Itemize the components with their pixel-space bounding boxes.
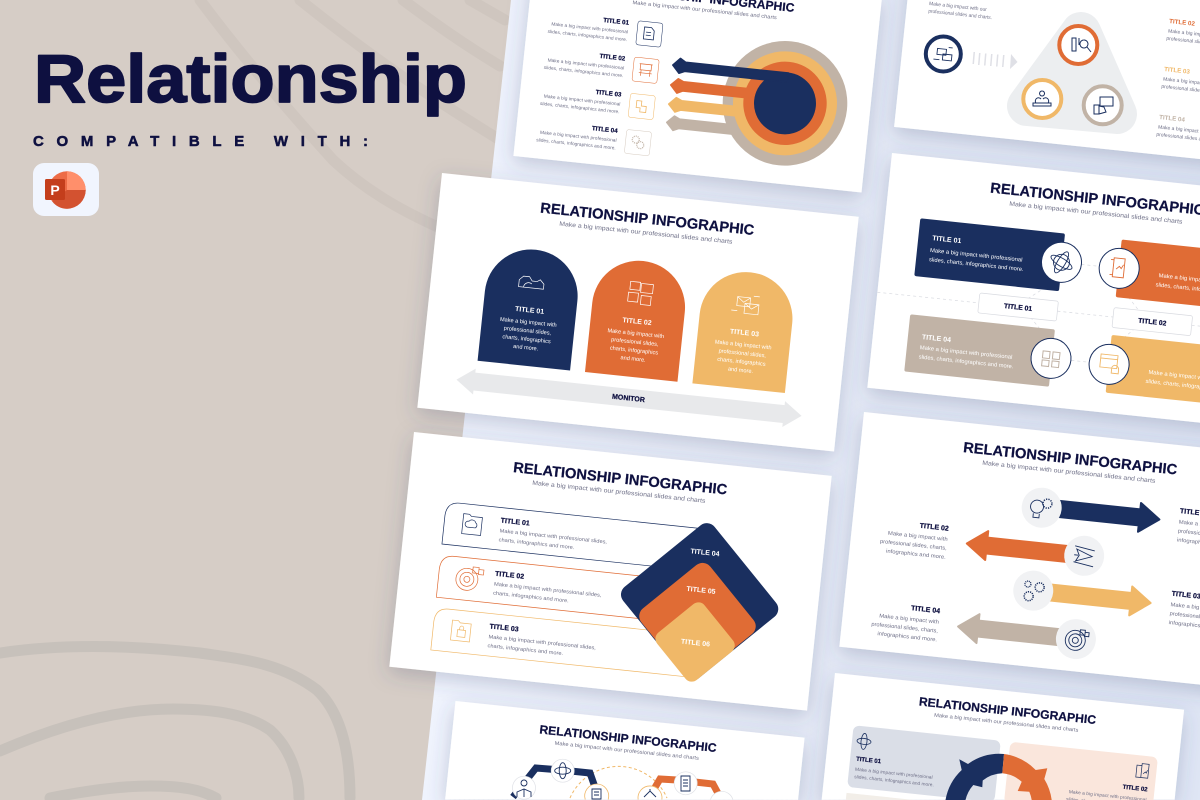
arch: title 02: professional slides,	[611, 337, 659, 348]
row 2	[543, 47, 659, 84]
triangle labels	[1156, 18, 1200, 145]
text: title 04: Make a big impact with	[879, 613, 939, 626]
text: title 02	[879, 519, 950, 561]
stacked diamonds: TITLE 05	[686, 586, 716, 596]
slide heading: Make a big impact with our professional slides and charts	[982, 460, 1156, 485]
arch: title 03: charts, infographics	[717, 357, 766, 368]
triangle labels: TITLE 02	[1169, 18, 1196, 28]
text: title 04: professional slides, charts,	[871, 622, 939, 635]
row 1: slides, charts, infographics and more.	[547, 29, 627, 42]
row: title 03: Make a big impact with professional slides,	[488, 634, 596, 651]
icon: taupe circle	[1084, 86, 1122, 124]
card: title 01: Make a big impact with professional	[855, 767, 933, 780]
icon: yellow circle	[1023, 80, 1061, 118]
icon: PowerPoint	[33, 163, 99, 216]
row 3: slides, charts, infographics and more.	[540, 101, 620, 114]
double arrow: monitor	[455, 367, 803, 429]
row 3	[540, 83, 656, 120]
card: title 01: TITLE 01	[856, 757, 882, 765]
row 4	[536, 120, 652, 156]
row 3: TITLE 03	[595, 89, 622, 99]
triangle labels: TITLE 03	[1164, 66, 1191, 76]
icon circle: calendar bell	[1087, 342, 1131, 386]
text: title 02: infographics and more.	[886, 549, 946, 561]
slide heading: RELATIONSHIP INFOGRAPHIC	[962, 440, 1178, 479]
ring chart	[946, 754, 1052, 800]
box: title 03	[1106, 335, 1200, 408]
row 4: slides, charts, infographics and more.	[536, 137, 616, 151]
panel: slide arrows	[839, 412, 1200, 691]
arrow: yellow right	[1011, 569, 1153, 623]
triangle panel	[1027, 32, 1117, 114]
icon: navy circle	[926, 36, 961, 72]
pill: title 02	[1112, 308, 1193, 336]
slide heading: Make a big impact with our professional slides and charts	[554, 741, 700, 762]
slide heading: RELATIONSHIP INFOGRAPHIC	[989, 181, 1200, 219]
arch: title 03	[692, 267, 797, 393]
row: title 02	[436, 555, 700, 624]
slide heading: RELATIONSHIP INFOGRAPHIC	[539, 722, 718, 755]
box: title 02	[1116, 239, 1200, 312]
card: title 02: TITLE 02	[1122, 785, 1148, 793]
text: title 04: TITLE 04	[911, 605, 940, 615]
arch: title 01: and more.	[513, 344, 539, 353]
concentric circle chart with arrows	[664, 29, 853, 172]
row: title 01: charts, infographics and more.	[498, 537, 575, 551]
arch: title 02	[585, 256, 690, 382]
intro text: professional slides and charts.	[928, 8, 992, 21]
arch: title 01: charts, infographics	[502, 334, 551, 345]
dashed connectors	[872, 244, 1200, 383]
stacked diamonds	[608, 510, 791, 694]
card: lower left	[846, 793, 914, 800]
row: title 02: Make a big impact with professional slides,	[494, 582, 602, 599]
slide heading: Make a big impact with our professional slides and charts	[559, 221, 733, 246]
row 1: TITLE 01	[603, 17, 630, 27]
card: title 01: slides, charts, infographics and more.	[854, 774, 934, 787]
subtitle: compatible with: COMPATIBLE WITH:	[33, 133, 368, 150]
box: title 04: TITLE 04	[921, 334, 951, 344]
row: title 03	[431, 608, 694, 677]
stacked diamonds: TITLE 06	[681, 639, 710, 649]
arch: title 01: TITLE 01	[515, 306, 545, 316]
slide heading: RELATIONSHIP INFOGRAPHIC	[512, 460, 728, 499]
row 2: slides, charts, infographics and more.	[544, 65, 624, 78]
icon circle: document chart	[1097, 246, 1141, 290]
arrow: striped	[972, 52, 1018, 69]
arch: title 03: and more.	[728, 366, 754, 375]
triangle labels: TITLE 04	[1159, 114, 1186, 124]
row 3: Make a big impact with professional	[544, 94, 621, 107]
slide heading: Make a big impact with our professional slides and charts	[632, 0, 778, 21]
row: title 01: Make a big impact with professional slides,	[499, 528, 607, 546]
row: title 02: TITLE 02	[495, 571, 525, 581]
slide heading: Make a big impact with our professional slides and charts	[1009, 201, 1183, 226]
box: title 04: slides, charts, infographics and more.	[918, 354, 1014, 370]
box: title 04: Make a big impact with professional	[919, 345, 1013, 361]
pill: title 01	[978, 293, 1058, 321]
arch: title 01: Make a big impact with	[500, 317, 557, 329]
slide heading: Make a big impact with our professional slides and charts	[532, 480, 706, 505]
orange chain	[638, 772, 733, 800]
box: title 01	[914, 218, 1065, 291]
arch: title 03: Make a big impact with	[715, 339, 772, 351]
panel: slide four boxes	[867, 153, 1200, 432]
arch: title 02: TITLE 02	[622, 317, 652, 327]
text: title 04	[870, 601, 941, 643]
double arrow: monitor: MONITOR	[612, 394, 645, 404]
row 1: Make a big impact with professional	[551, 21, 628, 34]
arrow: orange left	[965, 524, 1106, 578]
stacked diamonds: TITLE 04	[690, 548, 720, 558]
row 2: TITLE 02	[599, 53, 626, 63]
row: title 03: TITLE 03	[489, 623, 519, 634]
arrow: navy right	[1020, 486, 1161, 540]
dashed ring	[570, 766, 667, 798]
arch: title 01	[478, 245, 582, 370]
arch: title 02: and more.	[620, 355, 646, 364]
row: title 03: charts, infographics and more.	[487, 643, 563, 657]
row: title 01	[442, 502, 705, 571]
arch: title 02: Make a big impact with	[607, 328, 664, 340]
arrow: taupe left	[956, 607, 1098, 661]
text: title 02: professional slides, charts,	[880, 539, 947, 552]
text: title 04: infographics and more.	[877, 631, 937, 643]
card: title 02	[1004, 742, 1158, 800]
row 4: Make a big impact with professional	[540, 130, 617, 143]
panel: slide bottom right, ring	[822, 673, 1184, 800]
slide heading	[616, 0, 795, 23]
row 4: TITLE 04	[592, 125, 618, 135]
icon circle: globe	[1040, 240, 1083, 284]
box: title 01: TITLE 01	[932, 235, 962, 245]
panel: slide bottom left, chain	[445, 701, 805, 800]
text: title 01	[1177, 508, 1200, 550]
text: title 02: TITLE 02	[919, 523, 949, 533]
slide heading: RELATIONSHIP INFOGRAPHIC	[918, 694, 1097, 727]
title: Relationship	[34, 41, 467, 117]
panel: slide arches	[417, 173, 859, 452]
intro text	[928, 1, 993, 21]
text: title 02: Make a big impact with	[888, 531, 948, 543]
box: title 01: slides, charts, infographics and more.	[929, 257, 1024, 273]
icon: orange circle	[1059, 26, 1097, 64]
navy chain	[512, 759, 609, 800]
row: title 02: charts, infographics and more.	[493, 590, 569, 604]
blue showcase background	[422, 0, 1200, 800]
row 1	[547, 11, 663, 47]
text: title 03	[1168, 591, 1200, 633]
row: title 01: TITLE 01	[500, 518, 530, 528]
slide heading: RELATIONSHIP INFOGRAPHIC	[539, 201, 756, 239]
pill: title 02: TITLE 02	[1138, 318, 1167, 328]
box: title 01: Make a big impact with professional	[930, 248, 1023, 264]
panel: slide top right, triangle	[894, 0, 1200, 171]
row 2: Make a big impact with professional	[547, 57, 624, 71]
intro text: Make a big impact with our	[929, 1, 987, 13]
icon: PowerPoint: P	[50, 182, 60, 198]
arch: title 03: professional slides,	[718, 348, 767, 359]
icon circle: people	[1029, 336, 1073, 380]
card: title 01	[847, 725, 1001, 800]
slide heading: Make a big impact with our professional slides and charts	[934, 713, 1079, 734]
panel: slide top centre, concentric circles	[513, 0, 882, 193]
arch: title 01: professional slides,	[503, 326, 552, 337]
pill: title 01: TITLE 01	[1004, 303, 1033, 313]
box: title 04	[904, 314, 1055, 387]
arch: title 03: TITLE 03	[730, 328, 759, 339]
arch: title 02: charts, infographics	[610, 346, 659, 357]
panel: slide diamonds	[389, 432, 832, 711]
